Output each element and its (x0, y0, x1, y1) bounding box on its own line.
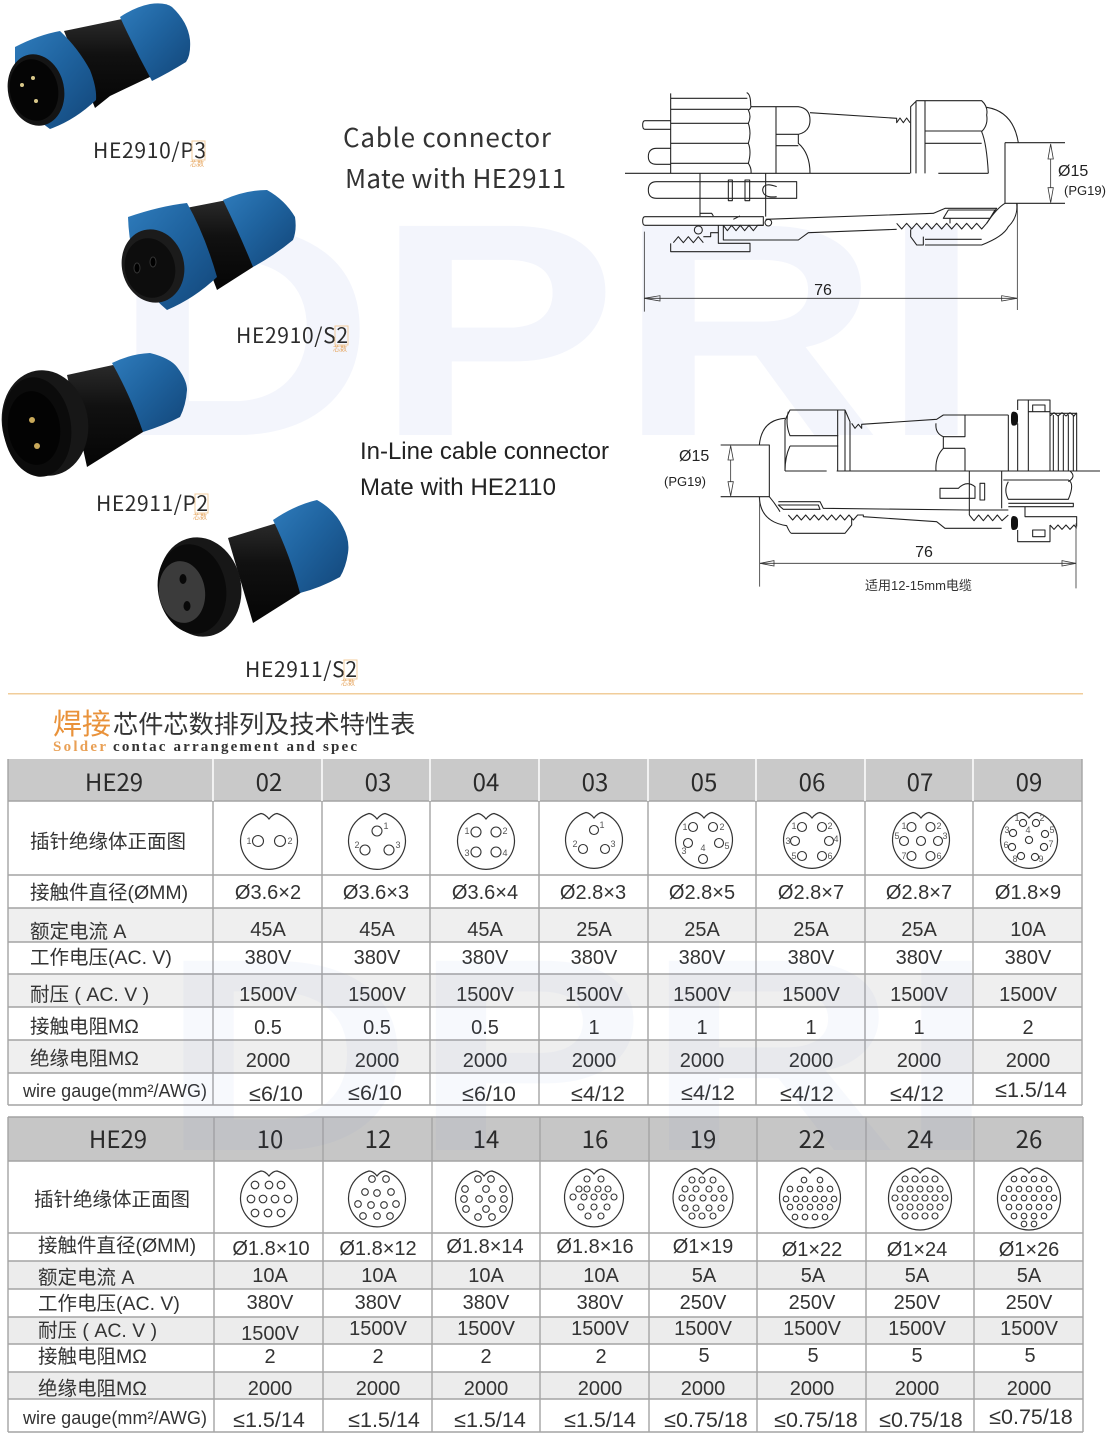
pin layout 02: 2 (287, 836, 293, 846)
row: contact diameter: Ø1×24 (887, 1239, 947, 1261)
row: withstand voltage (38, 1318, 1059, 1345)
row: contact diameter: Ø1×26 (999, 1239, 1059, 1261)
pin layout 05: 4 (700, 843, 706, 853)
row: wire gauge: wire gauge(mm²/AWG) (22, 1081, 207, 1101)
row: contact diameter: Ø2.8×3 (560, 882, 626, 904)
table 2 header: 10 (257, 1120, 283, 1155)
row: withstand voltage: 1500V (890, 984, 949, 1006)
row: working voltage: 380V (1005, 947, 1052, 969)
row: wire gauge: wire gauge(mm²/AWG) (22, 1408, 207, 1428)
row: contact resistance: 接触电阻MΩ (30, 1016, 139, 1038)
row: contact resistance: 1 (913, 1017, 925, 1039)
row: working voltage (38, 1292, 1053, 1315)
pin layout 22 (780, 1168, 840, 1228)
pin layout 04: 4 (502, 848, 508, 858)
row: withstand voltage: 1500V (674, 1318, 733, 1340)
pin layout 09 (1000, 812, 1058, 868)
table 2 header: 24 (907, 1120, 933, 1155)
caption: cable connector: Cable connector (343, 118, 552, 155)
row: wire gauge: ≤0.75/18 (989, 1405, 1073, 1429)
row: rated current: 额定电流 A (30, 921, 126, 943)
row: contact resistance: 接触电阻MΩ (38, 1346, 147, 1368)
row: wire gauge: ≤1.5/14 (348, 1408, 420, 1432)
row: contact diameter: Ø1.8×12 (339, 1238, 417, 1260)
row: contact resistance: 5 (1024, 1345, 1036, 1367)
pin layout 05: 1 (682, 822, 688, 832)
row: insulation resistance: 2000 (1006, 1050, 1050, 1072)
row: rated current: 25A (684, 919, 720, 941)
table 2 header: 19 (690, 1120, 716, 1155)
row: rated current: 10A (468, 1265, 504, 1287)
note: applicable cable: 适用12-15mm电缆 (865, 578, 972, 593)
row: contact resistance: 2 (480, 1346, 492, 1368)
pin layout 04: 1 (464, 826, 470, 836)
row: insulation resistance: 2000 (356, 1378, 400, 1400)
caption: in-line cable connector (360, 438, 609, 501)
row: insulation resistance: 2000 (578, 1378, 622, 1400)
pin layout 07: 5 (894, 831, 900, 841)
table 1 backgrounds (8, 759, 1082, 1073)
table 2 header (89, 1120, 1042, 1155)
row label: front view: 插针绝缘体正面图 (30, 831, 186, 853)
pin layout 06 (784, 812, 840, 868)
row: contact diameter: Ø3.6×2 (235, 882, 301, 904)
row: insulation resistance: 2000 (789, 1050, 833, 1072)
row: insulation resistance: 2000 (248, 1378, 292, 1400)
row: rated current: 10A (361, 1265, 397, 1287)
pin layout 07 (892, 812, 950, 868)
row: withstand voltage: 耐压 ( AC. V ) (30, 984, 149, 1006)
row: wire gauge: ≤0.75/18 (774, 1408, 858, 1432)
row: working voltage: 380V (355, 1292, 402, 1314)
row: insulation resistance: 2000 (355, 1050, 399, 1072)
row: wire gauge: ≤4/12 (780, 1082, 834, 1106)
row label: front view: 插针绝缘体正面图 (34, 1189, 190, 1211)
heading: chinese title: 芯件芯数排列及技术特性表 (113, 705, 415, 741)
table 2 header: 22 (799, 1120, 825, 1155)
row: contact resistance: 2 (1022, 1017, 1034, 1039)
row: rated current: 额定电流 A (38, 1267, 134, 1289)
label: HE2910/S2: HE2910/S2 (236, 320, 348, 350)
row: contact resistance: 2 (595, 1346, 607, 1368)
row: withstand voltage: 1500V (783, 1318, 842, 1340)
row: wire gauge: ≤4/12 (890, 1082, 944, 1106)
row: rated current: 25A (901, 919, 937, 941)
row: contact diameter: Ø1.8×14 (446, 1236, 524, 1258)
row: withstand voltage: 耐压 ( AC. V ) (38, 1320, 157, 1342)
pin layout 10 (240, 1171, 298, 1227)
row: wire gauge: ≤0.75/18 (879, 1408, 963, 1432)
row: withstand voltage: 1500V (349, 1318, 408, 1340)
table 1 header: 06 (799, 763, 825, 798)
row: contact resistance: 5 (807, 1345, 819, 1367)
row: wire gauge: ≤0.75/18 (664, 1408, 748, 1432)
row: wire gauge: ≤4/12 (681, 1081, 735, 1105)
pin layout 05 (676, 812, 732, 868)
row: working voltage: 380V (896, 947, 943, 969)
table 1 header: 03 (582, 763, 608, 798)
pin layout 09: 6 (1003, 840, 1009, 850)
table 1 header: 09 (1016, 763, 1042, 798)
watermark over tables: DPRI (160, 902, 995, 1209)
pin layout 03 small: 2 (572, 839, 578, 849)
row: withstand voltage: 1500V (571, 1318, 630, 1340)
pin layout 07: 7 (901, 851, 907, 861)
table 1 header: 02 (256, 763, 282, 798)
pin layout 07: 2 (936, 821, 942, 831)
pin layout 07: 6 (936, 851, 942, 861)
row: contact diameter (38, 1235, 1059, 1261)
pin layout 03 small: 3 (610, 839, 616, 849)
pin layout 03: 2 (354, 840, 360, 850)
label: HE2910/S2: 芯数 (333, 344, 347, 354)
table 2 header: 12 (365, 1120, 391, 1155)
pin layout 09: 9 (1038, 854, 1044, 864)
row: contact diameter: Ø1.8×16 (556, 1236, 634, 1258)
row: contact diameter: Ø1×19 (673, 1236, 733, 1258)
pin layout 06: 6 (827, 851, 833, 861)
row: rated current: 25A (576, 919, 612, 941)
row: wire gauge (22, 1078, 1067, 1106)
row: withstand voltage: 1500V (673, 984, 732, 1006)
row: rated current: 5A (905, 1265, 930, 1287)
row: rated current: 25A (793, 919, 829, 941)
heading rule (8, 693, 1083, 694)
row: working voltage: 250V (789, 1292, 836, 1314)
pin layout 09: 3 (1004, 825, 1010, 835)
row: contact resistance: 0.5 (471, 1017, 499, 1039)
label: HE2910/P3: HE2910/P3 (93, 135, 206, 165)
pin layout 19 (673, 1168, 733, 1227)
row: insulation resistance: 2000 (895, 1378, 939, 1400)
row: working voltage: 380V (462, 947, 509, 969)
table 2 header: 26 (1016, 1120, 1042, 1155)
pin layout 09: 5 (1049, 825, 1055, 835)
row: insulation resistance: 2000 (897, 1050, 941, 1072)
row: contact diameter: 接触件直径(ØMM) (38, 1235, 196, 1257)
row: withstand voltage: 1500V (456, 984, 515, 1006)
row: rated current: 5A (692, 1265, 717, 1287)
row: wire gauge: ≤6/10 (249, 1082, 303, 1106)
pin layout 07: 3 (942, 831, 948, 841)
pin layout 14 (456, 1171, 512, 1227)
table 1 (8, 759, 1082, 1106)
table 1 header: 04 (473, 763, 499, 798)
photo: HE2910/S2 connector (114, 190, 296, 310)
table 2 header: 16 (582, 1120, 608, 1155)
row: rated current (30, 919, 1046, 943)
pin layout 03 small: 1 (599, 820, 605, 830)
row: contact resistance: 1 (805, 1017, 817, 1039)
pin layout 06: 4 (833, 834, 839, 844)
pin layout 03 (348, 814, 406, 869)
row: rated current: 45A (359, 919, 395, 941)
row: insulation resistance: 2000 (572, 1050, 616, 1072)
row: working voltage: 250V (1006, 1292, 1053, 1314)
heading: english subtitle: contac arrangement and spec (113, 739, 358, 755)
table 1 header (85, 763, 1042, 798)
row: working voltage: 250V (680, 1292, 727, 1314)
label: HE2911/P2: HE2911/P2 (96, 488, 208, 518)
row: contact diameter: Ø1.8×10 (232, 1238, 310, 1260)
row: contact resistance (38, 1345, 1036, 1368)
pin layout 24 (888, 1168, 952, 1230)
pin layout 09: 4 (1025, 825, 1031, 835)
row: contact diameter: Ø1.8×9 (995, 882, 1061, 904)
row: working voltage: 工作电压(AC. V) (38, 1293, 180, 1315)
row: wire gauge: ≤1.5/14 (564, 1408, 636, 1432)
dimension: cable diameter (1058, 163, 1106, 198)
row: rated current (38, 1265, 1042, 1289)
table 1 header: HE29 (85, 763, 143, 798)
table 1 header: 05 (691, 763, 717, 798)
pin layout 06: 5 (791, 851, 797, 861)
row: withstand voltage: 1500V (782, 984, 841, 1006)
row: working voltage: 380V (571, 947, 618, 969)
heading: english subtitle: Solder (53, 739, 107, 755)
technical drawing: cable connector (625, 93, 1106, 312)
row: insulation resistance: 2000 (464, 1378, 508, 1400)
row: withstand voltage: 1500V (565, 984, 624, 1006)
row: working voltage: 250V (894, 1292, 941, 1314)
pin layout 06: 3 (785, 836, 791, 846)
row: rated current: 10A (252, 1265, 288, 1287)
row: contact diameter: Ø1×22 (782, 1239, 842, 1261)
row: rated current: 5A (1017, 1265, 1042, 1287)
caption: cable connector (343, 118, 566, 196)
row: withstand voltage: 1500V (241, 1323, 300, 1345)
table 1 header: 03 (365, 763, 391, 798)
pin layout 03: 3 (395, 840, 401, 850)
row: working voltage: 380V (245, 947, 292, 969)
row: insulation resistance: 2000 (463, 1050, 507, 1072)
row: contact diameter: Ø2.8×5 (669, 882, 735, 904)
caption: in-line cable connector: In-Line cable connector (360, 438, 609, 465)
pin layout 09: 8 (1012, 854, 1018, 864)
row: contact resistance: 1 (696, 1017, 708, 1039)
dimension: cable diameter (664, 448, 709, 489)
row: rated current: 45A (467, 919, 503, 941)
row: contact diameter: Ø3.6×4 (452, 882, 518, 904)
technical drawing: in-line connector (664, 400, 1100, 593)
row: working voltage: 380V (463, 1292, 510, 1314)
row: contact diameter: Ø2.8×7 (778, 882, 844, 904)
watermark: DPRI (112, 161, 982, 500)
row: wire gauge: ≤1.5/14 (454, 1408, 526, 1432)
row: insulation resistance: 2000 (246, 1050, 290, 1072)
pin layout 07: 1 (901, 821, 907, 831)
table 1 header: 07 (907, 763, 933, 798)
dimension: 76: 76 (915, 544, 933, 561)
row: contact resistance: 2 (372, 1346, 384, 1368)
row: insulation resistance (30, 1048, 1050, 1072)
row: wire gauge: ≤1.5/14 (995, 1078, 1067, 1102)
row: withstand voltage: 1500V (999, 984, 1058, 1006)
row: wire gauge (22, 1405, 1073, 1432)
dimension: cable diameter: (PG19) (664, 474, 706, 489)
pin layout 16 (564, 1169, 624, 1227)
table 2 header: 14 (473, 1120, 499, 1155)
row: contact diameter (30, 882, 1061, 904)
pin layout 05: 3 (681, 846, 687, 856)
row: withstand voltage: 1500V (888, 1318, 947, 1340)
pin layout 26 (998, 1168, 1060, 1230)
photo: HE2911/S2 connector (150, 500, 348, 644)
dimension: cable diameter: Ø15 (679, 448, 709, 465)
row: insulation resistance: 2000 (680, 1050, 724, 1072)
row: working voltage: 380V (247, 1292, 294, 1314)
row: contact resistance: 0.5 (254, 1017, 282, 1039)
label: HE2910/P3: 芯数 (190, 159, 204, 169)
pin layout 06: 1 (791, 821, 797, 831)
row: withstand voltage: 1500V (457, 1318, 516, 1340)
row: rated current: 10A (583, 1265, 619, 1287)
row: working voltage: 380V (354, 947, 401, 969)
pin layout 04 (458, 814, 514, 869)
row: working voltage (30, 947, 1052, 969)
label: HE2911/P2: 芯数 (193, 512, 207, 522)
row: insulation resistance: 2000 (1007, 1378, 1051, 1400)
row: withstand voltage: 1500V (1000, 1318, 1059, 1340)
row: insulation resistance (38, 1378, 1051, 1400)
dimension: 76: 76 (814, 282, 832, 299)
row: insulation resistance: 绝缘电阻MΩ (30, 1048, 139, 1070)
table 2 (8, 1117, 1083, 1432)
pin layout 09: 7 (1048, 839, 1054, 849)
row: rated current: 45A (250, 919, 286, 941)
row: wire gauge: ≤6/10 (462, 1082, 516, 1106)
pin layout 09: 1 (1014, 813, 1020, 823)
pin layout 09: 2 (1039, 813, 1045, 823)
pin layout 12 (348, 1171, 406, 1227)
row: contact resistance: 5 (911, 1345, 923, 1367)
pin layout 02 (240, 814, 298, 869)
table 2 backgrounds (8, 1117, 1083, 1399)
row: wire gauge: ≤6/10 (348, 1081, 402, 1105)
pin layout 04: 2 (502, 826, 508, 836)
photo: HE2911/P2 connector (0, 353, 187, 483)
row: withstand voltage: 1500V (348, 984, 407, 1006)
row: contact resistance: 0.5 (363, 1017, 391, 1039)
row: contact diameter: 接触件直径(ØMM) (30, 882, 188, 904)
pin layout 02: 1 (246, 836, 252, 846)
row: working voltage: 380V (577, 1292, 624, 1314)
label: HE2911/S2: HE2911/S2 (245, 654, 357, 684)
row: contact diameter: Ø2.8×7 (886, 882, 952, 904)
caption: cable connector: Mate with HE2911 (345, 159, 566, 196)
row: working voltage: 380V (679, 947, 726, 969)
row: rated current: 5A (801, 1265, 826, 1287)
pin layout 04: 3 (464, 848, 470, 858)
row: contact resistance: 2 (264, 1346, 276, 1368)
row: contact diameter: Ø3.6×3 (343, 882, 409, 904)
pin layout 05: 2 (719, 822, 725, 832)
pin layout 03: 1 (383, 821, 389, 831)
dimension: cable diameter: (PG19) (1064, 183, 1106, 198)
dimension: cable diameter: Ø15 (1058, 163, 1088, 180)
row: insulation resistance: 2000 (681, 1378, 725, 1400)
pin layout 03 small (566, 812, 622, 868)
row: insulation resistance: 绝缘电阻MΩ (38, 1378, 147, 1400)
table 2 header: HE29 (89, 1120, 147, 1155)
row: working voltage: 工作电压(AC. V) (30, 947, 172, 969)
row: wire gauge: ≤1.5/14 (233, 1408, 305, 1432)
photo: HE2910/P3 connector (1, 3, 190, 131)
row: rated current: 10A (1010, 919, 1046, 941)
row: contact resistance: 1 (588, 1017, 600, 1039)
row: insulation resistance: 2000 (790, 1378, 834, 1400)
pin layout 06: 2 (827, 821, 833, 831)
heading: chinese title: 焊接 (53, 701, 111, 743)
row: contact resistance: 5 (698, 1345, 710, 1367)
row: contact resistance (30, 1016, 1034, 1039)
row: wire gauge: ≤4/12 (571, 1082, 625, 1106)
label: HE2911/S2: 芯数 (341, 678, 355, 688)
caption: in-line cable connector: Mate with HE2110 (360, 474, 556, 501)
row: withstand voltage (30, 984, 1058, 1006)
row: working voltage: 380V (788, 947, 835, 969)
row: withstand voltage: 1500V (239, 984, 298, 1006)
pin layout 05: 5 (724, 841, 730, 851)
